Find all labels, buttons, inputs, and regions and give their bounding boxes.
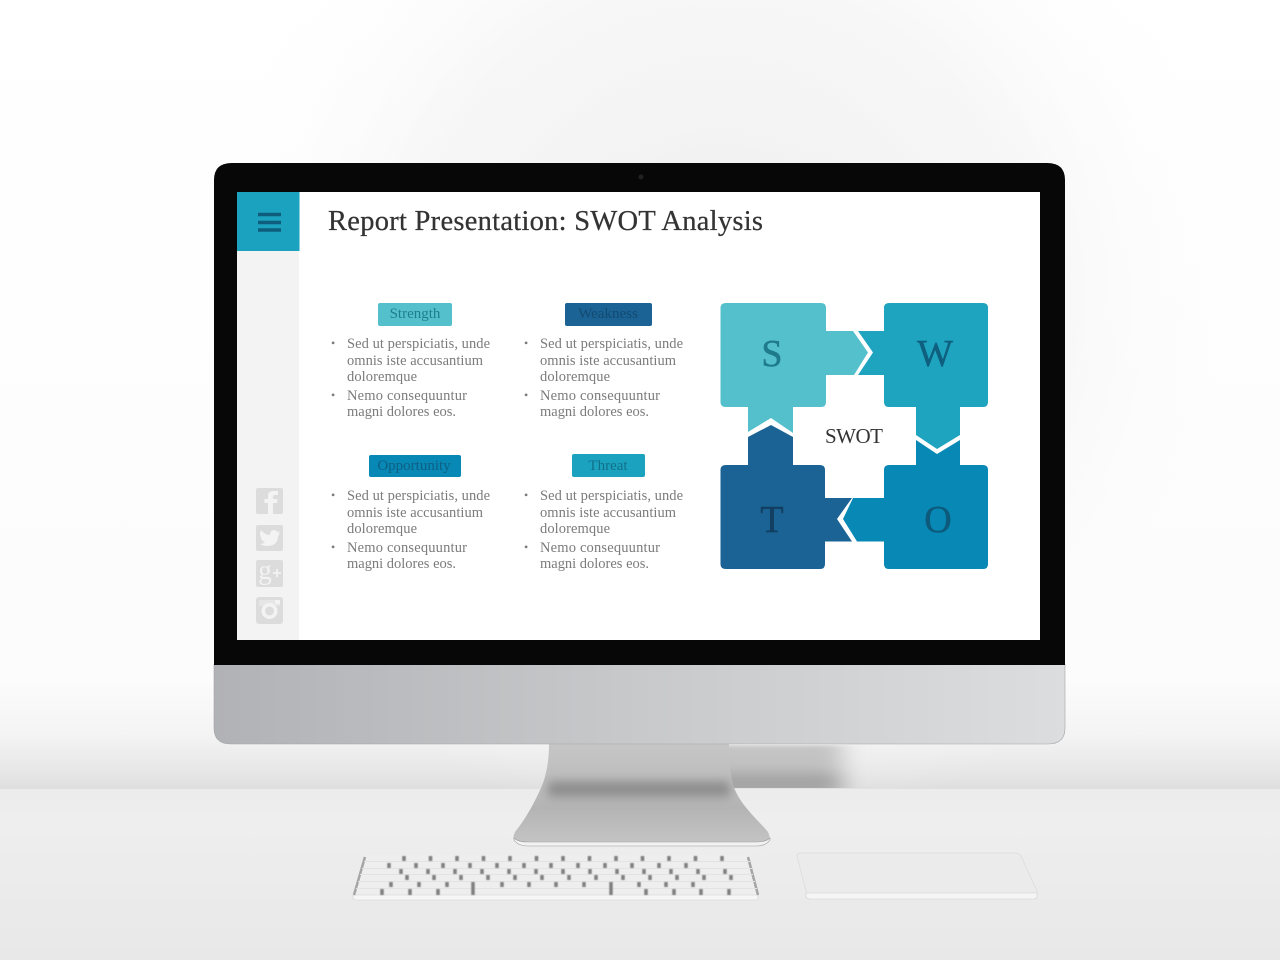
label: weakness [565, 303, 652, 326]
bullets: opportunity [331, 488, 490, 572]
bullets: opportunity: omnis iste accusantium [347, 505, 484, 521]
bullets: weakness [524, 336, 683, 420]
monitor bezel [214, 163, 1065, 665]
bullets: threat: magni dolores eos. [540, 556, 649, 572]
bullets: threat: doloremque [540, 521, 610, 537]
bullets: weakness: Nemo consequuntur [540, 388, 660, 404]
bullets: weakness: doloremque [540, 369, 610, 385]
panel: threat [524, 454, 683, 572]
label: strength: Strength [390, 306, 441, 322]
piece: W: W [917, 333, 953, 375]
bullets: strength: Nemo consequuntur [347, 388, 467, 404]
bullets: weakness: • [524, 388, 528, 402]
bullets: weakness: omnis iste accusantium [540, 353, 677, 369]
piece: O [843, 440, 988, 569]
bullets: strength: • [331, 336, 335, 350]
bullets: opportunity: • [331, 540, 335, 554]
bullets: threat: Nemo consequuntur [540, 540, 660, 556]
icon: facebook [256, 488, 283, 514]
bullets: opportunity: magni dolores eos. [347, 556, 456, 572]
screen [237, 192, 1040, 900]
sidebar [237, 192, 299, 640]
bullets: opportunity: • [331, 488, 335, 502]
title: Report Presentation: SWOT Analysis [328, 206, 763, 237]
piece: T [720, 425, 852, 569]
bullets: opportunity: Sed ut perspiciatis, unde [347, 488, 490, 504]
bullets: opportunity: Nemo consequuntur [347, 540, 467, 556]
bullets: threat: omnis iste accusantium [540, 505, 677, 521]
bullets: weakness: magni dolores eos. [540, 404, 649, 420]
piece: W [858, 303, 988, 449]
bullets: weakness: Sed ut perspiciatis, unde [540, 336, 683, 352]
icon: camera [638, 174, 644, 180]
bullets: threat [524, 488, 683, 572]
bullets: strength: • [331, 388, 335, 402]
bullets: strength: omnis iste accusantium [347, 353, 484, 369]
icon: google plus: g [258, 555, 272, 585]
bullets: strength: magni dolores eos. [347, 404, 456, 420]
label: threat [572, 454, 645, 477]
bullets: threat: • [524, 488, 528, 502]
bullets: strength: doloremque [347, 369, 417, 385]
label: opportunity [369, 455, 461, 477]
SWOT diagram [720, 303, 988, 569]
piece: S [720, 303, 868, 433]
bullets: threat: • [524, 540, 528, 554]
monitor stand [514, 744, 770, 846]
panel: weakness [524, 303, 683, 420]
menu button [237, 192, 300, 251]
key gaps [382, 856, 731, 895]
label: strength [378, 303, 452, 326]
piece: S: S [761, 333, 783, 375]
social icons [256, 488, 283, 624]
bullets: threat: Sed ut perspiciatis, unde [540, 488, 683, 504]
icon: twitter [256, 525, 283, 551]
label: opportunity: Opportunity [377, 458, 451, 474]
bullets: strength: Sed ut perspiciatis, unde [347, 336, 490, 352]
piece: O: O [924, 499, 952, 541]
icon: instagram [256, 597, 283, 624]
keyboard [353, 855, 758, 900]
piece: T: T [760, 499, 784, 541]
bullets: strength [331, 336, 490, 420]
label: weakness: Weakness [578, 306, 638, 322]
trackpad [797, 853, 1037, 899]
icon: hamburger [258, 214, 281, 230]
panel: opportunity [331, 455, 490, 572]
monitor chin [214, 664, 1065, 744]
bullets: weakness: • [524, 336, 528, 350]
bullets: opportunity: doloremque [347, 521, 417, 537]
panel: strength [331, 303, 490, 420]
center label: SWOT [825, 424, 883, 448]
label: threat: Threat [588, 458, 628, 474]
